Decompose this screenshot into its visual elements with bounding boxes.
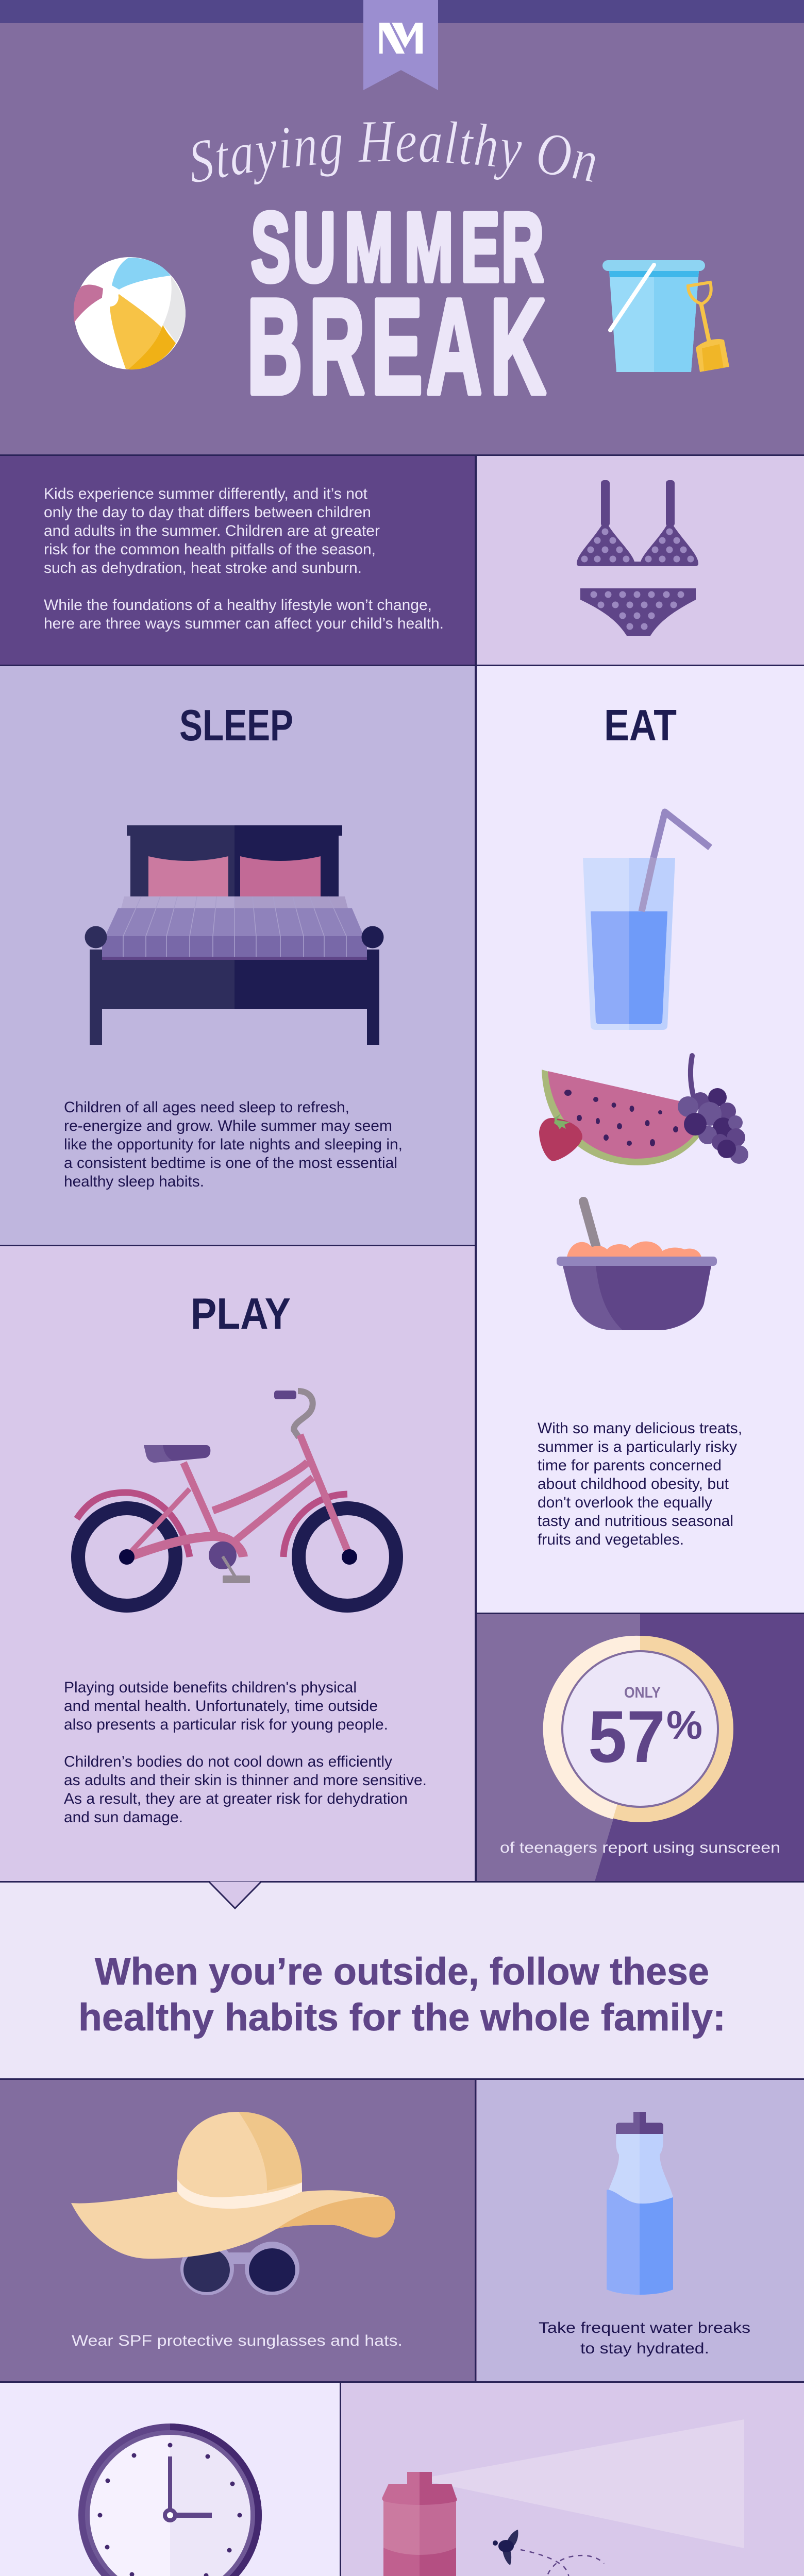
panel: clock [0, 2383, 340, 2576]
intro text: here are three ways summer can affect your child’s health. [44, 615, 444, 632]
panel: eat [477, 666, 804, 1613]
panel: water bottle [477, 2080, 804, 2381]
icon: spray can [382, 2472, 457, 2576]
icon: fly [493, 2530, 518, 2565]
stat label: only: ONLY [624, 1684, 661, 1701]
dashed flight path [521, 2550, 604, 2576]
title: summer: SUMMER [251, 193, 544, 302]
play text [64, 1679, 427, 1826]
script title: Staying Healthy On [192, 122, 595, 184]
panel: intro [0, 456, 475, 665]
icon: bed [85, 825, 383, 1045]
sleep text: healthy sleep habits. [64, 1173, 204, 1190]
icon: water bottle [607, 2112, 673, 2295]
heading: sleep: SLEEP [179, 701, 293, 750]
eat text: fruits and vegetables. [538, 1531, 684, 1548]
play text: Children’s bodies do not cool down as efficiently [64, 1753, 392, 1770]
caption: water [539, 2319, 750, 2357]
panel: sleep [0, 666, 475, 1245]
icon: drinking glass [583, 812, 710, 1030]
icon: clock [78, 2424, 262, 2576]
eat text: don't overlook the equally [538, 1494, 712, 1511]
intro text: risk for the common health pitfalls of the season, [44, 541, 376, 558]
eat text: summer is a particularly risky [538, 1438, 737, 1455]
panel: header [0, 0, 804, 422]
play text: and mental health. Unfortunately, time outside [64, 1698, 378, 1715]
intro text: While the foundations of a healthy lifestyle won’t change, [44, 597, 432, 614]
sleep text: a consistent bedtime is one of the most essential [64, 1155, 397, 1172]
donut chart [543, 1636, 733, 1822]
panel: habits banner [0, 1881, 804, 2078]
sleep text: Children of all ages need sleep to refresh, [64, 1099, 349, 1116]
icon: bikini [577, 480, 698, 636]
panel: bikini [477, 456, 804, 665]
eat text: With so many delicious treats, [538, 1420, 742, 1437]
caption: water: to stay hydrated. [580, 2340, 709, 2357]
panel: bug spray [341, 2383, 804, 2576]
panel: hat and sunglasses [0, 2080, 475, 2381]
eat text: time for parents concerned [538, 1457, 722, 1474]
arrow: pointer [209, 1882, 261, 1908]
play text: also presents a particular risk for young people. [64, 1716, 388, 1733]
sleep text: re-energize and grow. While summer may seem [64, 1117, 392, 1134]
sleep text [64, 1099, 403, 1190]
intro text: only the day to day that differs between children [44, 504, 371, 521]
spray cone [432, 2419, 744, 2548]
ribbon with logo [363, 0, 438, 90]
stat value: 57 percent: 57 [588, 1696, 665, 1778]
stat value: 57 percent: % [666, 1702, 702, 1748]
icon: sun hat [71, 2112, 395, 2259]
icon: bicycle [77, 1391, 396, 1605]
panel: 57% statistic [477, 1614, 804, 1882]
panel: play [0, 1246, 475, 1882]
intro text: such as dehydration, heat stroke and sunburn. [44, 560, 362, 577]
play text: Playing outside benefits children's physical [64, 1679, 357, 1696]
intro text: and adults in the summer. Children are at greater [44, 522, 380, 539]
heading: habits [78, 1950, 726, 2039]
icon: watermelon, strawberry and grapes [539, 1056, 748, 1165]
heading: habits: When you’re outside, follow these [95, 1950, 709, 1993]
heading: play: PLAY [191, 1290, 291, 1338]
eat text: about childhood obesity, but [538, 1476, 729, 1493]
icon: beach ball [74, 257, 186, 369]
play text: and sun damage. [64, 1809, 183, 1826]
heading: eat: EAT [604, 701, 677, 750]
eat text: tasty and nutritious seasonal [538, 1513, 733, 1530]
icon: bucket and shovel [602, 260, 729, 372]
play text: as adults and their skin is thinner and more sensitive. [64, 1772, 427, 1789]
intro text [44, 485, 444, 632]
eat text [538, 1420, 742, 1548]
sleep text: like the opportunity for late nights and sleeping in, [64, 1136, 403, 1153]
play text: As a result, they are at greater risk for dehydration [64, 1790, 408, 1807]
icon: bowl with spoon [557, 1201, 717, 1330]
heading: habits: healthy habits for the whole family: [78, 1996, 726, 2039]
intro text: Kids experience summer differently, and it’s not [44, 485, 368, 502]
icon: sunglasses [180, 2242, 299, 2295]
stat caption: of teenagers report using sunscreen [500, 1839, 780, 1856]
title: break: BREAK [247, 272, 546, 422]
caption: water: Take frequent water breaks [539, 2319, 750, 2336]
caption: hats: Wear SPF protective sunglasses and hats. [72, 2332, 403, 2349]
